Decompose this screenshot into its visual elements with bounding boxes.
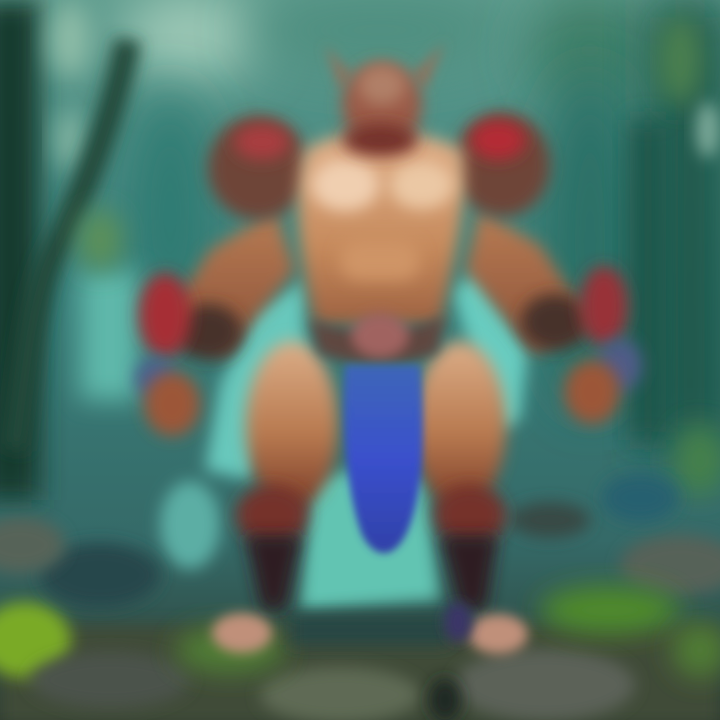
mossy rocky ground — [0, 474, 720, 720]
creature — [135, 42, 642, 654]
chest highlights — [311, 159, 454, 280]
arms — [135, 210, 642, 436]
belt — [310, 313, 445, 364]
legs — [212, 341, 528, 654]
head — [325, 42, 445, 156]
blue loincloth — [344, 365, 423, 553]
shoulder armor — [208, 113, 550, 220]
torso — [298, 131, 464, 325]
aqua glow behind creature — [160, 270, 528, 610]
